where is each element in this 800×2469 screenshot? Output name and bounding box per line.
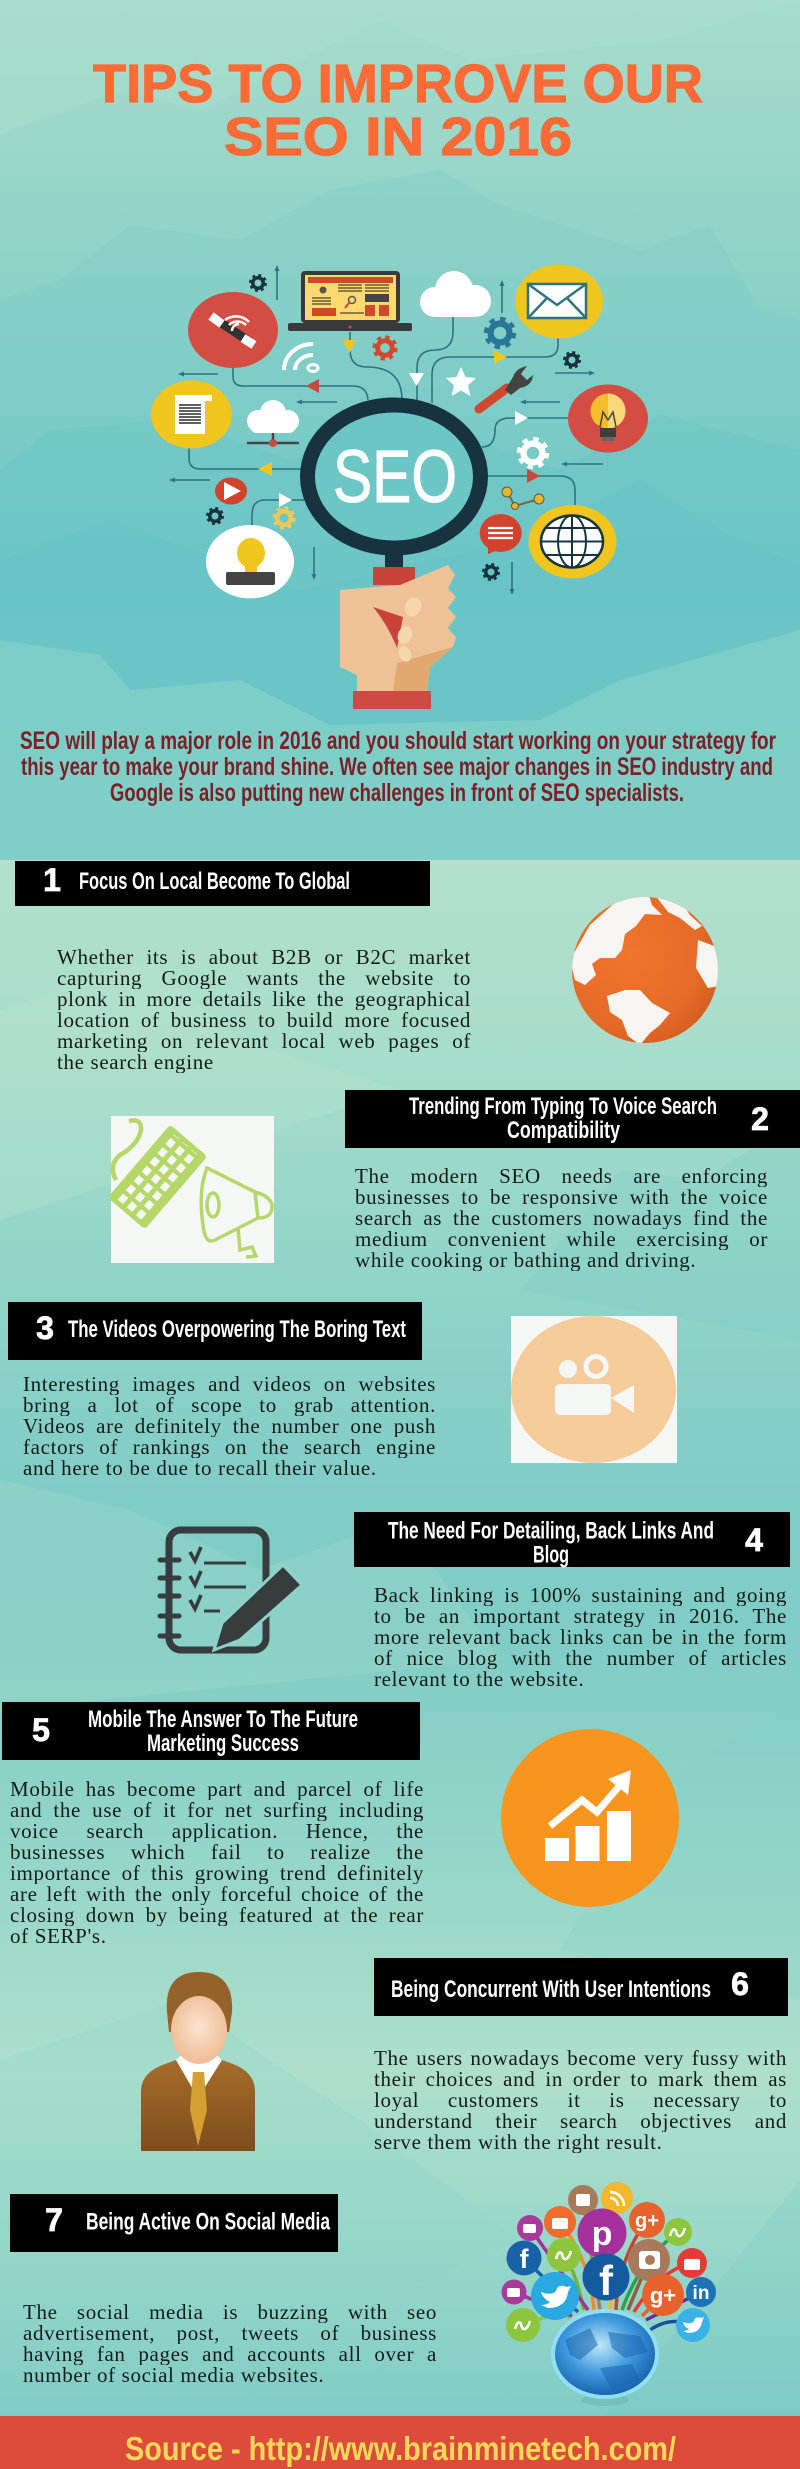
heading bar 5: Marketing Success: [147, 1730, 299, 1757]
flow arrowheads: [258, 340, 540, 507]
small arrowheads: [169, 265, 595, 595]
globe: [581, 2394, 629, 2406]
heading bar 1: [15, 861, 430, 906]
heading bar 7: 7: [45, 2202, 63, 2238]
icon: person badge: [206, 525, 294, 598]
icon: cloud: [420, 271, 491, 317]
icons: gears: [207, 275, 580, 580]
icon: social media tree: f: [599, 2257, 614, 2304]
icon: laptop: [288, 271, 412, 331]
heading bar 3: The Videos Overpowering The Boring Text: [68, 1316, 406, 1343]
icon: small cloud network: [247, 400, 299, 447]
illustration: SEO magnifying glass hub: [151, 264, 648, 709]
heading bar 6: [374, 1958, 788, 2016]
icon: social media tree: [502, 2182, 716, 2406]
connector lines: [173, 269, 603, 591]
icon: social media tree: p: [592, 2215, 612, 2253]
heading bar 5: [2, 1702, 420, 1760]
icon: growth chart: [501, 1729, 679, 1907]
heading bar 2: Compatibility: [507, 1117, 620, 1144]
heading bar 3: 3: [36, 1310, 54, 1346]
icon: mail badge: [515, 264, 603, 338]
heading bar 1: 1: [43, 862, 61, 898]
icon: play badge: [215, 478, 247, 504]
icon: chat bubble: [480, 514, 522, 554]
icon: light bulb badge: [568, 384, 648, 452]
heading bar 7: Being Active On Social Media: [86, 2208, 330, 2236]
icon: document badge: [151, 380, 232, 448]
icon: phone badge: [188, 292, 278, 368]
heading bar 1: Focus On Local Become To Global: [79, 868, 350, 895]
background: upper section: [0, 0, 800, 862]
icon: orange globe: [572, 897, 718, 1043]
bubbles: [568, 2185, 598, 2215]
icon: wifi: [284, 344, 318, 372]
body text 1: [57, 947, 471, 1073]
title: [93, 54, 703, 167]
heading bar 2: 2: [751, 1101, 769, 1137]
heading bar 2: [345, 1090, 800, 1148]
branches: [514, 2198, 701, 2330]
body text 6: [374, 2048, 787, 2153]
icon: businessman: [141, 1972, 255, 2151]
footer source banner: Source - http://www.brainminetech.com/: [125, 2430, 676, 2467]
icon: magnifying glass: [308, 405, 480, 585]
heading bar 4: Blog: [533, 1542, 569, 1568]
icon: social media tree: g+: [650, 2283, 676, 2308]
title: SEO IN 2016: [224, 107, 572, 167]
footer source banner: [0, 2416, 800, 2469]
heading bar 5: Mobile The Answer To The Future: [88, 1706, 358, 1733]
body text 5: [10, 1779, 424, 1947]
icon: hand: [340, 565, 456, 709]
icon: star: [446, 367, 476, 396]
heading bar 5: 5: [32, 1712, 50, 1748]
heading bar 6: 6: [731, 1966, 749, 2002]
heading bar 7: [10, 2194, 338, 2252]
icon: wrench: [479, 366, 533, 409]
intro paragraph: [20, 727, 776, 807]
body text 3: [23, 1374, 436, 1479]
body text 7: [23, 2302, 437, 2386]
body text 4: [374, 1585, 787, 1690]
SEO lens label: SEO: [333, 435, 457, 518]
heading bar 4: [354, 1512, 790, 1568]
icon: share nodes: [502, 487, 544, 510]
icon: social media tree: f: [520, 2244, 530, 2274]
icon: social media tree: g+: [635, 2210, 659, 2232]
icon: video camera: [511, 1316, 677, 1463]
icon: keyboard and megaphone: [108, 1116, 274, 1263]
body text 2: [355, 1166, 768, 1271]
icon: globe badge: [528, 505, 616, 578]
icon: checklist and pencil: [160, 1530, 302, 1650]
heading bar 3: [8, 1302, 422, 1360]
background: lower section: [0, 860, 800, 2420]
heading bar 4: 4: [745, 1522, 763, 1558]
icon: social media tree: in: [693, 2283, 709, 2304]
title: TIPS TO IMPROVE OUR: [93, 54, 703, 114]
